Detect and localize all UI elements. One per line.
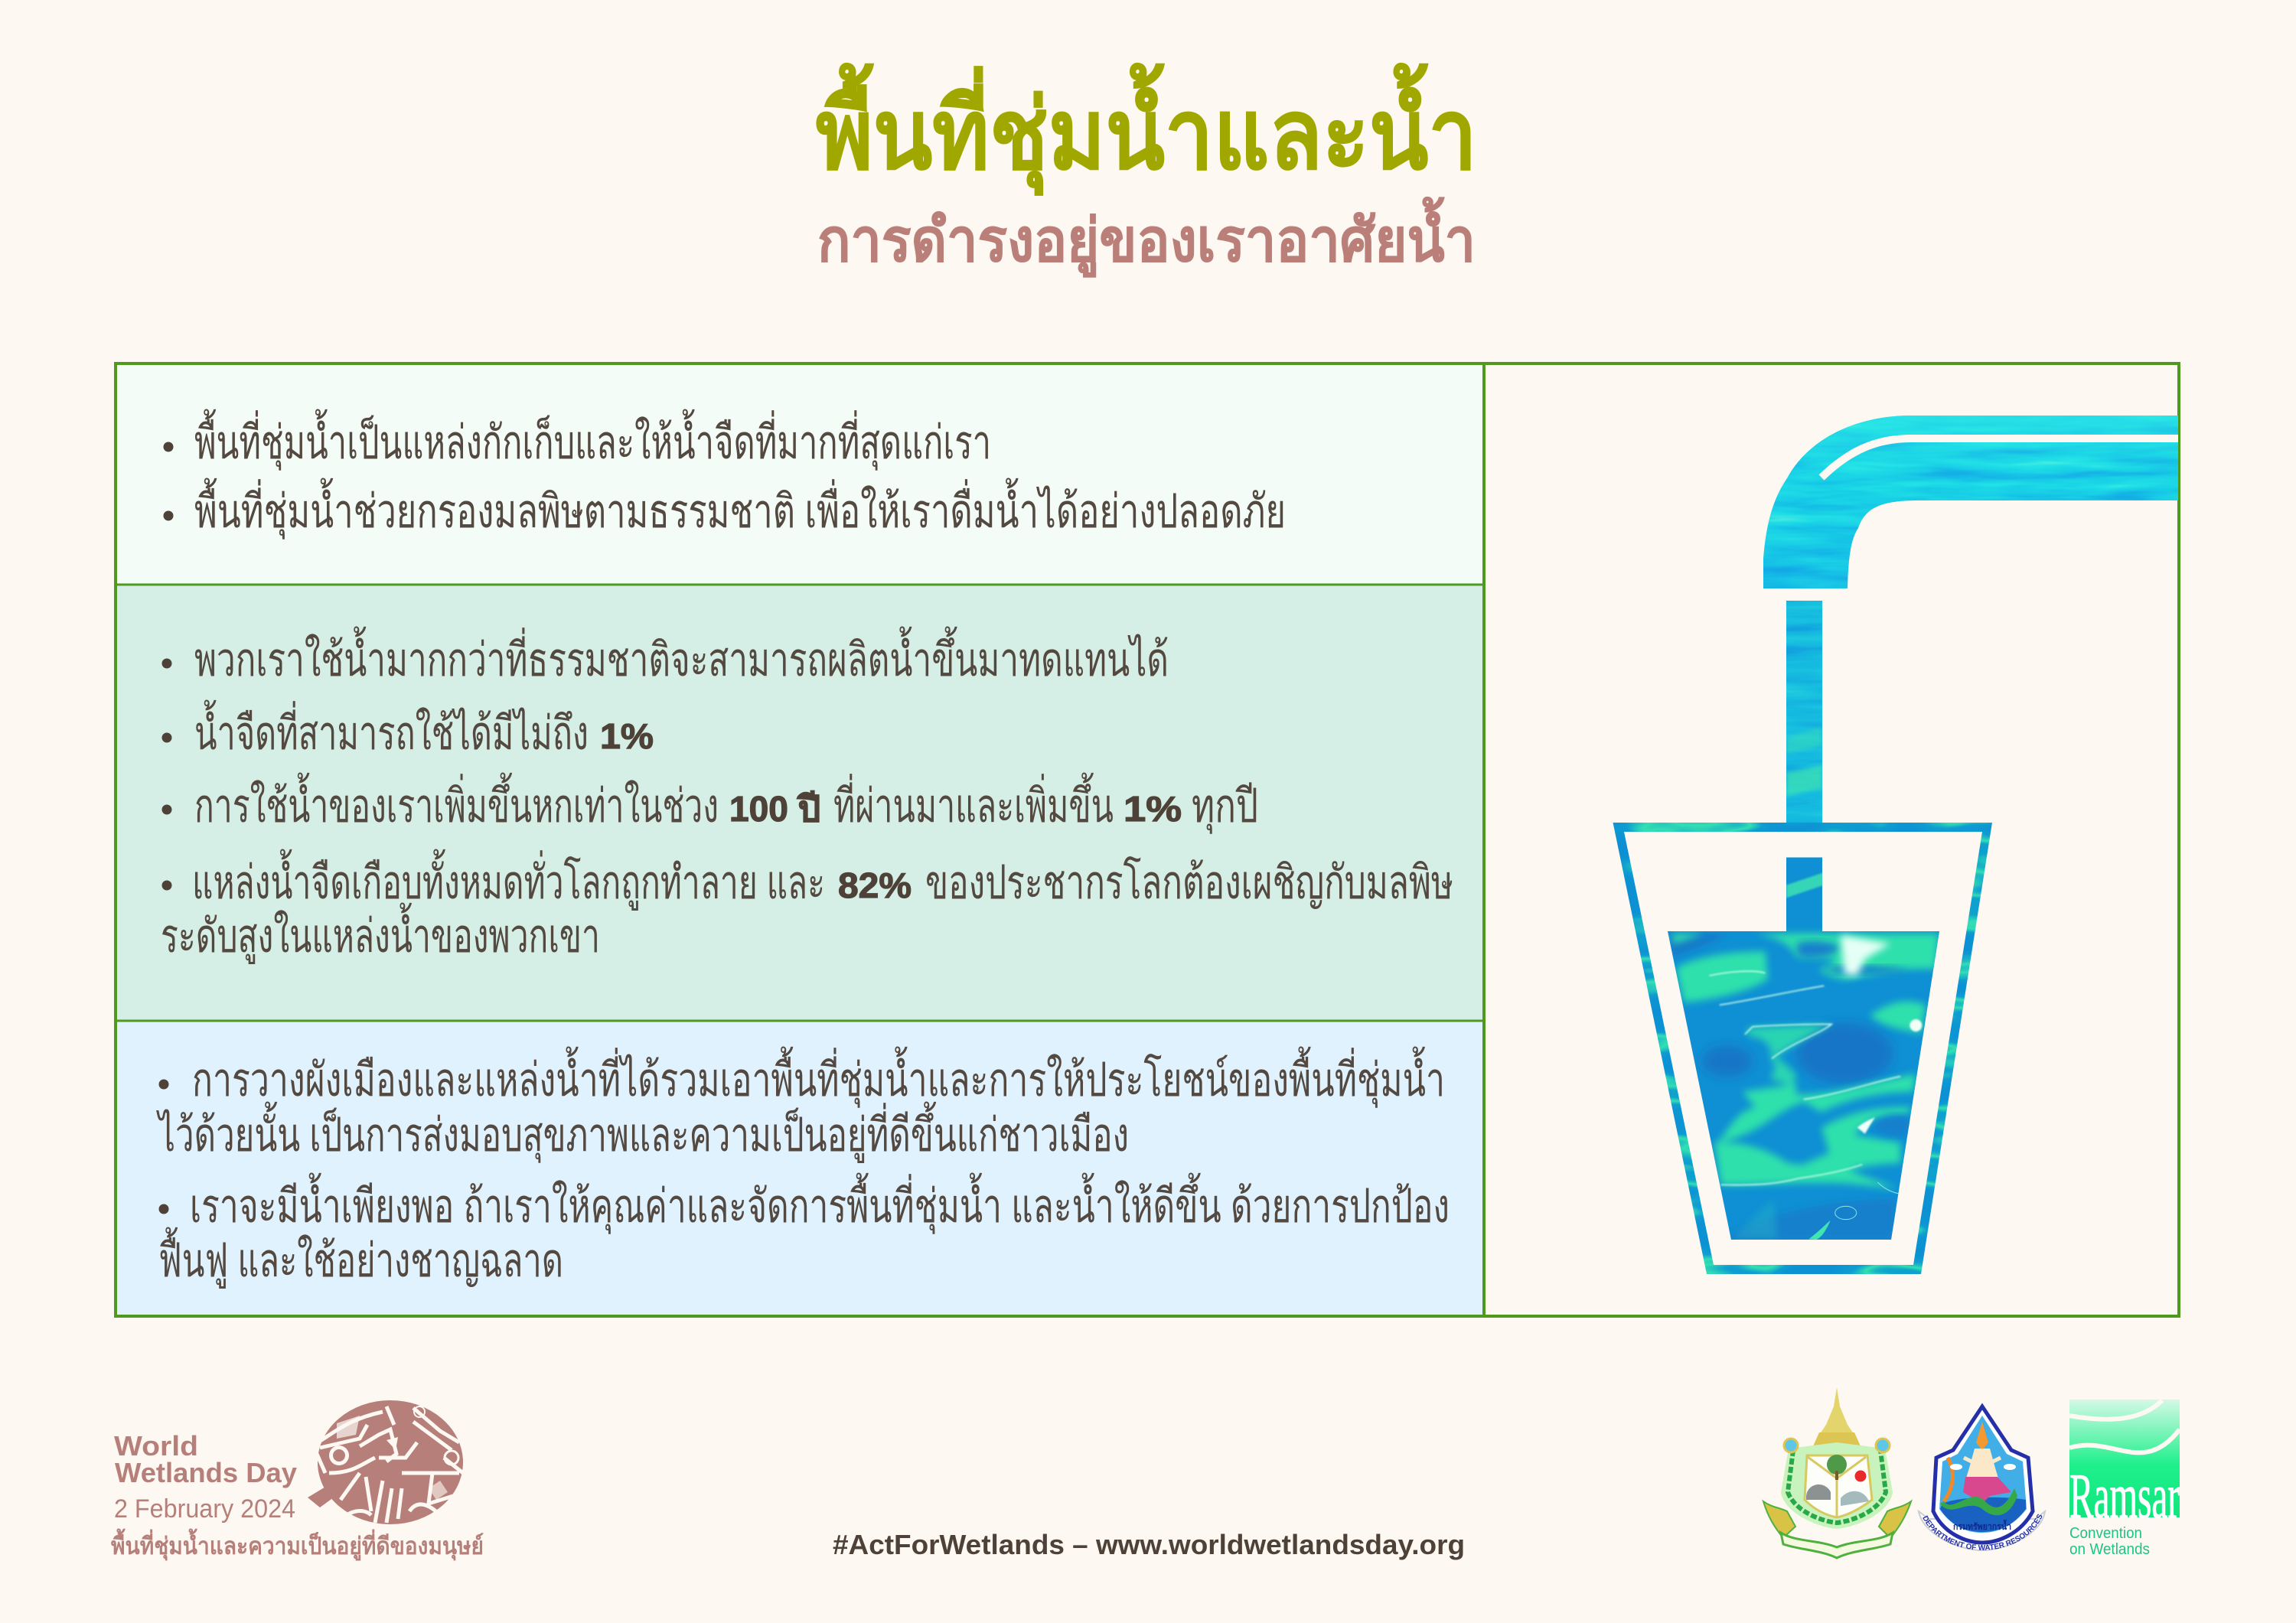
logo: Ramsar Convention on Wetlands: on Wetlands <box>2069 1541 2150 1558</box>
panel: water use statistics <box>116 585 1485 1021</box>
logo: Ramsar Convention on Wetlands <box>2069 1400 2180 1558</box>
department name on curved band: DEPARTMENT OF WATER RESOURCES <box>1923 1514 2042 1550</box>
logo wordmark: World <box>114 1430 198 1462</box>
panel: planning and wise use <box>116 1022 1485 1315</box>
subtitle: การดำรงอยู่ของเราอาศัยน้ำ <box>817 197 1476 278</box>
bullet list: water use facts: การใช้น้ำของเราเพิ่มขึ้นหกเท่าในช่วง <box>194 772 719 832</box>
bullet list: urban planning and wise use: การวางผังเมืองและแหล่งน้ำที่ได้รวมเอาพื้นที่ชุ่มน้ำและการให้ประโยชน์ของพื้นที่ชุ่มน้ำ <box>192 1046 1445 1108</box>
bullet list: water use facts: 1% <box>600 716 654 756</box>
logo: ministry emblem <box>1763 1387 1911 1558</box>
panel: wetlands store and filter water <box>116 364 1485 585</box>
icon: falling water stream <box>1786 601 1822 823</box>
bullet list: wetlands provide water: พื้นที่ชุ่มน้ำช่วยกรองมลพิษตามธรรมชาติ เพื่อให้เราดื่มน้ำได้อย่างปลอดภัย <box>194 477 1286 539</box>
logo wordmark: Wetlands Day <box>115 1457 297 1488</box>
logo: Ramsar Convention on Wetlands: Ramsar <box>2069 1461 2180 1532</box>
bullet list: water use facts: 82% <box>838 865 912 905</box>
logo emblem: wetland globe <box>308 1400 463 1524</box>
bullet list: water use facts: 1% <box>1124 789 1182 829</box>
icon: water faucet <box>1763 416 2178 588</box>
title: พื้นที่ชุ่มน้ำและน้ำ <box>816 63 1477 196</box>
footer hashtag and website: #ActForWetlands – www.worldwetlandsday.org <box>833 1529 1465 1560</box>
icon: glass outline <box>1607 819 1998 1278</box>
bullet list: urban planning and wise use: เราจะมีน้ำเพียงพอ ถ้าเราให้คุณค่าและจัดการพื้นที่ชุ่มน้ำ และน้ำให้ดีขึ้น ด้วยการปกป้อง <box>190 1172 1450 1234</box>
bullet list: water use facts: พวกเราใช้น้ำมากกว่าที่ธรรมชาติจะสามารถผลิตน้ำขึ้นมาทดแทนได้ <box>194 626 1169 686</box>
logo: Ramsar Convention on Wetlands: Convention <box>2069 1525 2142 1542</box>
logo: Department of Water Resources <box>1918 1403 2047 1551</box>
World Wetlands Day logo <box>111 1400 484 1561</box>
bullet list: water use facts: ทุกปี <box>1192 780 1258 834</box>
icon: water in glass <box>1661 853 1944 1243</box>
bullet list: water use facts <box>161 626 1453 964</box>
bullet list: wetlands provide water: พื้นที่ชุ่มน้ำเป็นแหล่งกักเก็บและให้น้ำจืดที่มากที่สุดแก่เรา <box>194 409 991 471</box>
bullet list: water use facts: น้ำจืดที่สามารถใช้ได้มีไม่ถึง <box>194 699 589 759</box>
logo wordmark: พื้นที่ชุ่มน้ำและความเป็นอยู่ที่ดีของมนุษย์ <box>111 1528 484 1561</box>
logo wordmark <box>111 1430 484 1561</box>
bullet list: urban planning and wise use: ไว้ด้วยนั้น เป็นการส่งมอบสุขภาพและความเป็นอยู่ที่ดีขึ้นแก่ชาวเมือง <box>155 1101 1129 1163</box>
bullet list: water use facts: ระดับสูงในแหล่งน้ำของพวกเขา <box>161 902 600 964</box>
bullet list: water use facts: ของประชากรโลกต้องเผชิญกับมลพิษ <box>925 855 1453 909</box>
logo wordmark: 2 February 2024 <box>114 1494 295 1524</box>
bullet list: wetlands provide water <box>164 409 1286 539</box>
bullet list: water use facts: 100 ปี <box>729 789 820 829</box>
panel frame <box>116 363 2179 1316</box>
bullet list: urban planning and wise use: ฟื้นฟู และใช้อย่างชาญฉลาด <box>158 1227 563 1289</box>
bullet list: urban planning and wise use <box>155 1046 1450 1289</box>
shield name text: กรมทรัพยากรน้ำ <box>1953 1519 2011 1532</box>
bullet list: water use facts: ที่ผ่านมาและเพิ่มขึ้น <box>833 772 1114 832</box>
bullet list: water use facts: แหล่งน้ำจืดเกือบทั้งหมดทั่วโลกถูกทำลาย และ <box>192 849 825 911</box>
